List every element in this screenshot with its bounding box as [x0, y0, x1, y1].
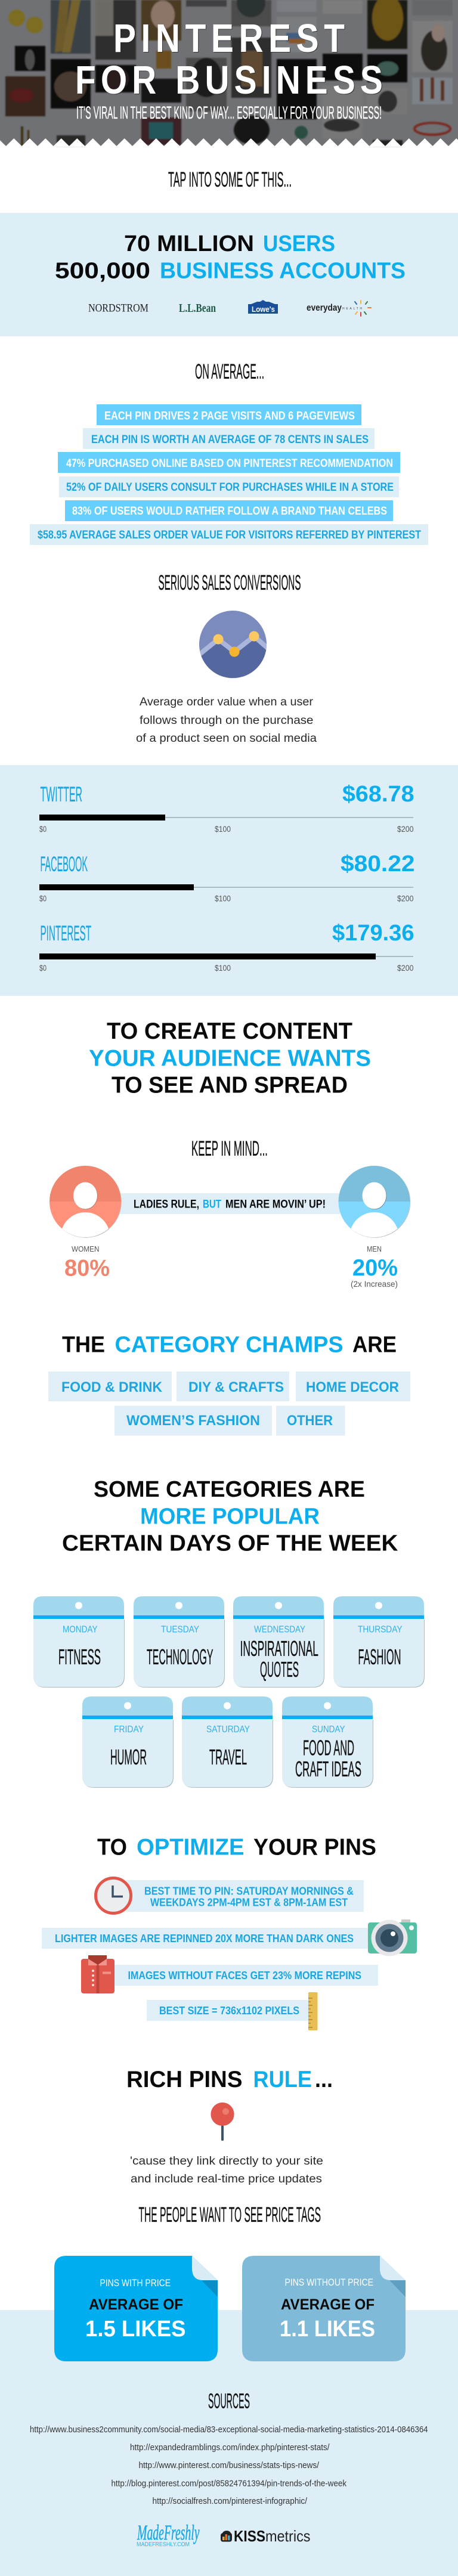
users headline: 500,000 — [55, 259, 150, 284]
chart: pinterest: $100 — [215, 963, 231, 973]
card: wednesday: INSPIRATIONAL — [240, 1636, 318, 1661]
heading: more popular: MORE POPULAR — [140, 1504, 320, 1529]
logo: Nordstrom: NORDSTROM — [88, 302, 148, 315]
users headline — [55, 231, 406, 284]
card: saturday — [182, 1696, 273, 1788]
chip: womens fashion: WOMEN’S FASHION — [126, 1413, 260, 1429]
chart: twitter — [39, 782, 414, 834]
tip: without faces: IMAGES WITHOUT FACES GET 23% MORE REPINS — [128, 1969, 361, 1981]
card: wednesday: WEDNESDAY — [254, 1624, 305, 1635]
card: sunday: SUNDAY — [312, 1724, 345, 1735]
heading: rich pins rule: RULE — [253, 2067, 312, 2092]
card: friday: FRIDAY — [114, 1724, 144, 1735]
chip: womens fashion — [114, 1406, 272, 1436]
users headline: USERS — [263, 231, 335, 256]
card: pins with price: 1.5 LIKES — [85, 2317, 186, 2342]
text: rich pins description: and include real-time price updates — [131, 2173, 322, 2185]
stat: pin visits — [97, 404, 361, 425]
stat: men: MEN — [367, 1244, 382, 1253]
text: SOURCES — [208, 2390, 250, 2413]
title — [75, 17, 383, 103]
zigzag edge — [0, 138, 458, 147]
chart: facebook: FACEBOOK — [41, 853, 88, 876]
icon: shirt — [81, 1955, 114, 1993]
icon: clock — [95, 1878, 131, 1913]
card: pins without price — [242, 2256, 406, 2361]
heading: rich pins rule — [126, 2067, 333, 2092]
chart: facebook — [39, 852, 415, 903]
tip: best size — [147, 2000, 310, 2021]
card: pins with price: PINS WITH PRICE — [100, 2277, 171, 2289]
banner: ladies rule: MEN ARE MOVIN’ UP! — [225, 1199, 326, 1210]
card: tuesday — [134, 1596, 225, 1688]
tip: lighter images: LIGHTER IMAGES ARE REPINNED 20X MORE THAN DARK ONES — [55, 1932, 354, 1945]
chip: other — [276, 1406, 345, 1436]
heading: create content: YOUR AUDIENCE WANTS — [89, 1046, 371, 1071]
chip: food and drink: FOOD & DRINK — [61, 1379, 163, 1395]
chip: home decor — [296, 1371, 410, 1401]
heading: more popular: SOME CATEGORIES ARE — [94, 1477, 365, 1502]
card: pins without price: PINS WITHOUT PRICE — [285, 2277, 373, 2288]
chart: twitter: $0 — [39, 824, 47, 834]
logo: MadeFreshly — [137, 2521, 200, 2548]
logo: Lowe's — [248, 300, 278, 314]
chart: twitter: $100 — [215, 824, 231, 834]
tip: best time: BEST TIME TO PIN: SATURDAY MORNINGS & — [144, 1884, 354, 1897]
card: sunday: FOOD AND — [303, 1735, 354, 1760]
stat: men — [351, 1244, 398, 1289]
chip: diy and crafts: DIY & CRAFTS — [188, 1379, 284, 1395]
text: ON AVERAGE... — [195, 360, 264, 383]
category chips — [48, 1371, 410, 1436]
heading: optimize your pins: YOUR PINS — [253, 1834, 376, 1860]
heading: category champs: ARE — [352, 1332, 397, 1357]
chart: pinterest: PINTEREST — [41, 922, 91, 945]
card: thursday: THURSDAY — [358, 1624, 403, 1635]
text: KEEP IN MIND... — [191, 1137, 268, 1160]
card: pins without price: 1.1 LIKES — [280, 2317, 375, 2342]
chart: twitter: $68.78 — [342, 782, 414, 807]
heading: create content: TO CREATE CONTENT — [107, 1018, 352, 1044]
stat: follow a brand: 83% OF USERS WOULD RATHER FOLLOW A BRAND THAN CELEBS — [72, 505, 387, 518]
banner: ladies rule — [119, 1193, 340, 1214]
icon: line chart circle — [197, 611, 268, 680]
photo collage tiles — [5, 0, 453, 146]
logo: KISSmetrics — [221, 2527, 310, 2545]
icon: push pin — [211, 2103, 234, 2141]
card: saturday: TRAVEL — [209, 1745, 247, 1769]
card: monday: FITNESS — [58, 1645, 101, 1669]
icon: ruler — [308, 1992, 317, 2030]
stat: women: WOMEN — [72, 1244, 99, 1253]
text: source links — [30, 2425, 428, 2506]
card: pins with price — [54, 2256, 218, 2361]
chart: facebook: $0 — [39, 893, 47, 903]
title: FOR BUSINESS — [75, 58, 383, 103]
text: source links: http://www.business2community.com/social-media/83-exceptional-social-media-marketing-statistics-2014-0846364 — [30, 2425, 428, 2435]
heading: more popular: CERTAIN DAYS OF THE WEEK — [62, 1531, 398, 1556]
tip: best time — [126, 1880, 364, 1912]
chip: home decor: HOME DECOR — [306, 1379, 399, 1395]
card: wednesday — [233, 1596, 324, 1688]
heading: create content: TO SEE AND SPREAD — [112, 1072, 348, 1098]
stat: cents in sales — [83, 428, 375, 449]
icon: woman avatar — [49, 1166, 122, 1238]
card: pins with price: AVERAGE OF — [89, 2296, 183, 2313]
heading: optimize your pins: OPTIMIZE — [137, 1834, 245, 1860]
stat: follow a brand — [65, 500, 393, 521]
text: source links: http://socialfresh.com/pinterest-infographic/ — [153, 2497, 308, 2506]
heading: rich pins rule: RICH PINS — [126, 2067, 242, 2092]
heading: optimize your pins — [97, 1834, 376, 1860]
card: sunday: CRAFT IDEAS — [295, 1757, 361, 1781]
card: saturday: SATURDAY — [206, 1724, 250, 1735]
logo: everyday health: everyday — [307, 303, 342, 313]
stat: purchased online — [58, 452, 400, 473]
panel: pin tips — [42, 1878, 417, 2030]
logo: L.L.Bean: L.L.Bean — [179, 302, 216, 315]
heading: more popular — [62, 1477, 398, 1556]
card: friday: HUMOR — [110, 1745, 147, 1769]
stat: men: 20% — [352, 1255, 398, 1281]
logo: Lowe's: Lowe's — [252, 305, 275, 314]
heading: rich pins rule: ... — [315, 2067, 333, 2092]
calendar cards — [33, 1596, 425, 1788]
card: friday — [82, 1696, 174, 1788]
panel: social order values — [0, 765, 458, 996]
panel: users stats — [0, 213, 458, 336]
stat: order value — [30, 524, 428, 545]
heading: create content — [89, 1018, 371, 1098]
text: source links: http://expandedramblings.com/index.php/pinterest-stats/ — [130, 2443, 330, 2453]
text: rich pins description — [130, 2155, 323, 2185]
text: order value description — [136, 696, 317, 745]
card: thursday: FASHION — [358, 1645, 401, 1669]
tip: best time: WEEKDAYS 2PM-4PM EST & 8PM-1AM EST — [150, 1896, 348, 1908]
heading: category champs — [62, 1332, 397, 1357]
text: source links: http://www.pinterest.com/business/stats-tips-news/ — [138, 2461, 320, 2470]
text: order value description: follows through on the purchase — [140, 714, 314, 727]
users headline: BUSINESS ACCOUNTS — [160, 259, 406, 284]
banner: ladies rule: LADIES RULE, — [134, 1199, 199, 1210]
heading: category champs: THE — [62, 1332, 105, 1357]
chart: twitter: $200 — [397, 824, 414, 834]
chart: pinterest — [39, 921, 414, 973]
text: order value description: of a product seen on social media — [136, 732, 317, 745]
title: PINTEREST — [113, 17, 345, 61]
footer band — [0, 2310, 458, 2576]
stat: cents in sales: EACH PIN IS WORTH AN AVERAGE OF 78 CENTS IN SALES — [91, 434, 369, 446]
tip: best size: BEST SIZE = 736x1102 PIXELS — [159, 2004, 299, 2017]
logo: everyday health — [307, 301, 371, 316]
logo: KISSmetrics: metrics — [265, 2527, 310, 2545]
panel: audience gender split — [49, 1166, 410, 1289]
tip: lighter images — [42, 1928, 369, 1949]
banner: ladies rule: BUT — [203, 1199, 221, 1210]
chip: diy and crafts — [177, 1371, 289, 1401]
stat: daily users: 52% OF DAILY USERS CONSULT FOR PURCHASES WHILE IN A STORE — [66, 481, 394, 494]
users headline: 70 MILLION — [124, 231, 254, 256]
logo: KISSmetrics: KISS — [234, 2527, 265, 2545]
card: wednesday: QUOTES — [260, 1657, 299, 1682]
chip: other: OTHER — [287, 1413, 333, 1429]
stat: women: 80% — [64, 1256, 110, 1281]
chart: pinterest: $0 — [39, 963, 47, 973]
text: order value description: Average order value when a user — [140, 696, 314, 708]
chart: pinterest: $179.36 — [332, 921, 414, 946]
stat: purchased online: 47% PURCHASED ONLINE BASED ON PINTEREST RECOMMENDATION — [66, 457, 393, 470]
chart: facebook: $200 — [397, 893, 414, 903]
chip: food and drink — [48, 1371, 172, 1401]
logo: MadeFreshly: MadeFreshly — [137, 2521, 200, 2544]
stat bars — [30, 404, 428, 545]
icon: camera — [368, 1919, 417, 1956]
text: rich pins description: 'cause they link directly to your site — [130, 2155, 323, 2168]
card: pins without price: AVERAGE OF — [281, 2296, 375, 2313]
card: monday: MONDAY — [63, 1624, 98, 1635]
header panel: photo collage — [0, 0, 458, 147]
chart: twitter: TWITTER — [41, 783, 82, 806]
card: tuesday: TUESDAY — [161, 1624, 199, 1635]
heading: category champs: CATEGORY CHAMPS — [114, 1332, 344, 1357]
text: source links: http://blog.pinterest.com/post/85824761394/pin-trends-of-the-week — [111, 2479, 347, 2489]
chart: facebook: $100 — [215, 893, 231, 903]
chart: pinterest: $200 — [397, 963, 414, 973]
logo: everyday health: HEALTH — [342, 307, 362, 311]
icon: man avatar — [339, 1166, 410, 1238]
stat: pin visits: EACH PIN DRIVES 2 PAGE VISITS AND 6 PAGEVIEWS — [104, 410, 355, 422]
text: TAP INTO SOME OF THIS... — [168, 168, 292, 191]
card: thursday — [333, 1596, 425, 1688]
logo: MadeFreshly: MADEFRESHLY.COM — [137, 2541, 190, 2548]
chart: facebook: $80.22 — [341, 852, 415, 877]
card: monday — [33, 1596, 125, 1688]
card: sunday — [282, 1696, 373, 1788]
stat: women — [64, 1244, 110, 1281]
stat: daily users — [59, 476, 399, 497]
tip: without faces — [111, 1965, 378, 1986]
card: tuesday: TECHNOLOGY — [147, 1645, 213, 1669]
stat: men: (2x Increase) — [351, 1279, 398, 1289]
heading: optimize your pins: TO — [97, 1834, 127, 1860]
